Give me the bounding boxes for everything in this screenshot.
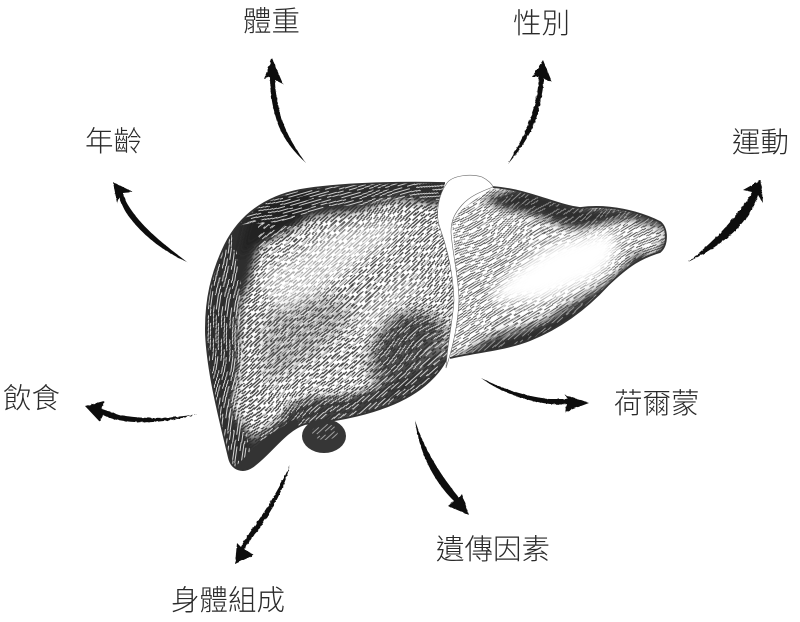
arrow: weight <box>264 58 306 163</box>
label: diet: 飲食 <box>3 383 60 415</box>
liver illustration <box>205 174 667 471</box>
label: sex: 性別 <box>513 8 570 40</box>
arrow: age <box>113 182 187 262</box>
right lobe of liver <box>205 182 454 471</box>
label: genetic factors: 遺傳因素 <box>436 534 550 566</box>
label: age: 年齡 <box>85 126 142 158</box>
arrow: exercise <box>688 180 763 262</box>
falciform ligament <box>438 175 493 368</box>
arrow: genetic factors <box>415 420 469 515</box>
arrow: sex <box>508 60 552 164</box>
arrow: hormones <box>481 378 589 412</box>
label: exercise: 運動 <box>732 127 789 159</box>
arrow: diet <box>85 401 197 422</box>
label: body composition: 身體組成 <box>171 585 285 617</box>
label: weight: 體重 <box>243 6 300 38</box>
left lobe of liver <box>450 186 667 359</box>
arrow: body composition <box>235 465 290 564</box>
gallbladder <box>302 419 346 453</box>
label: hormones: 荷爾蒙 <box>614 388 700 420</box>
